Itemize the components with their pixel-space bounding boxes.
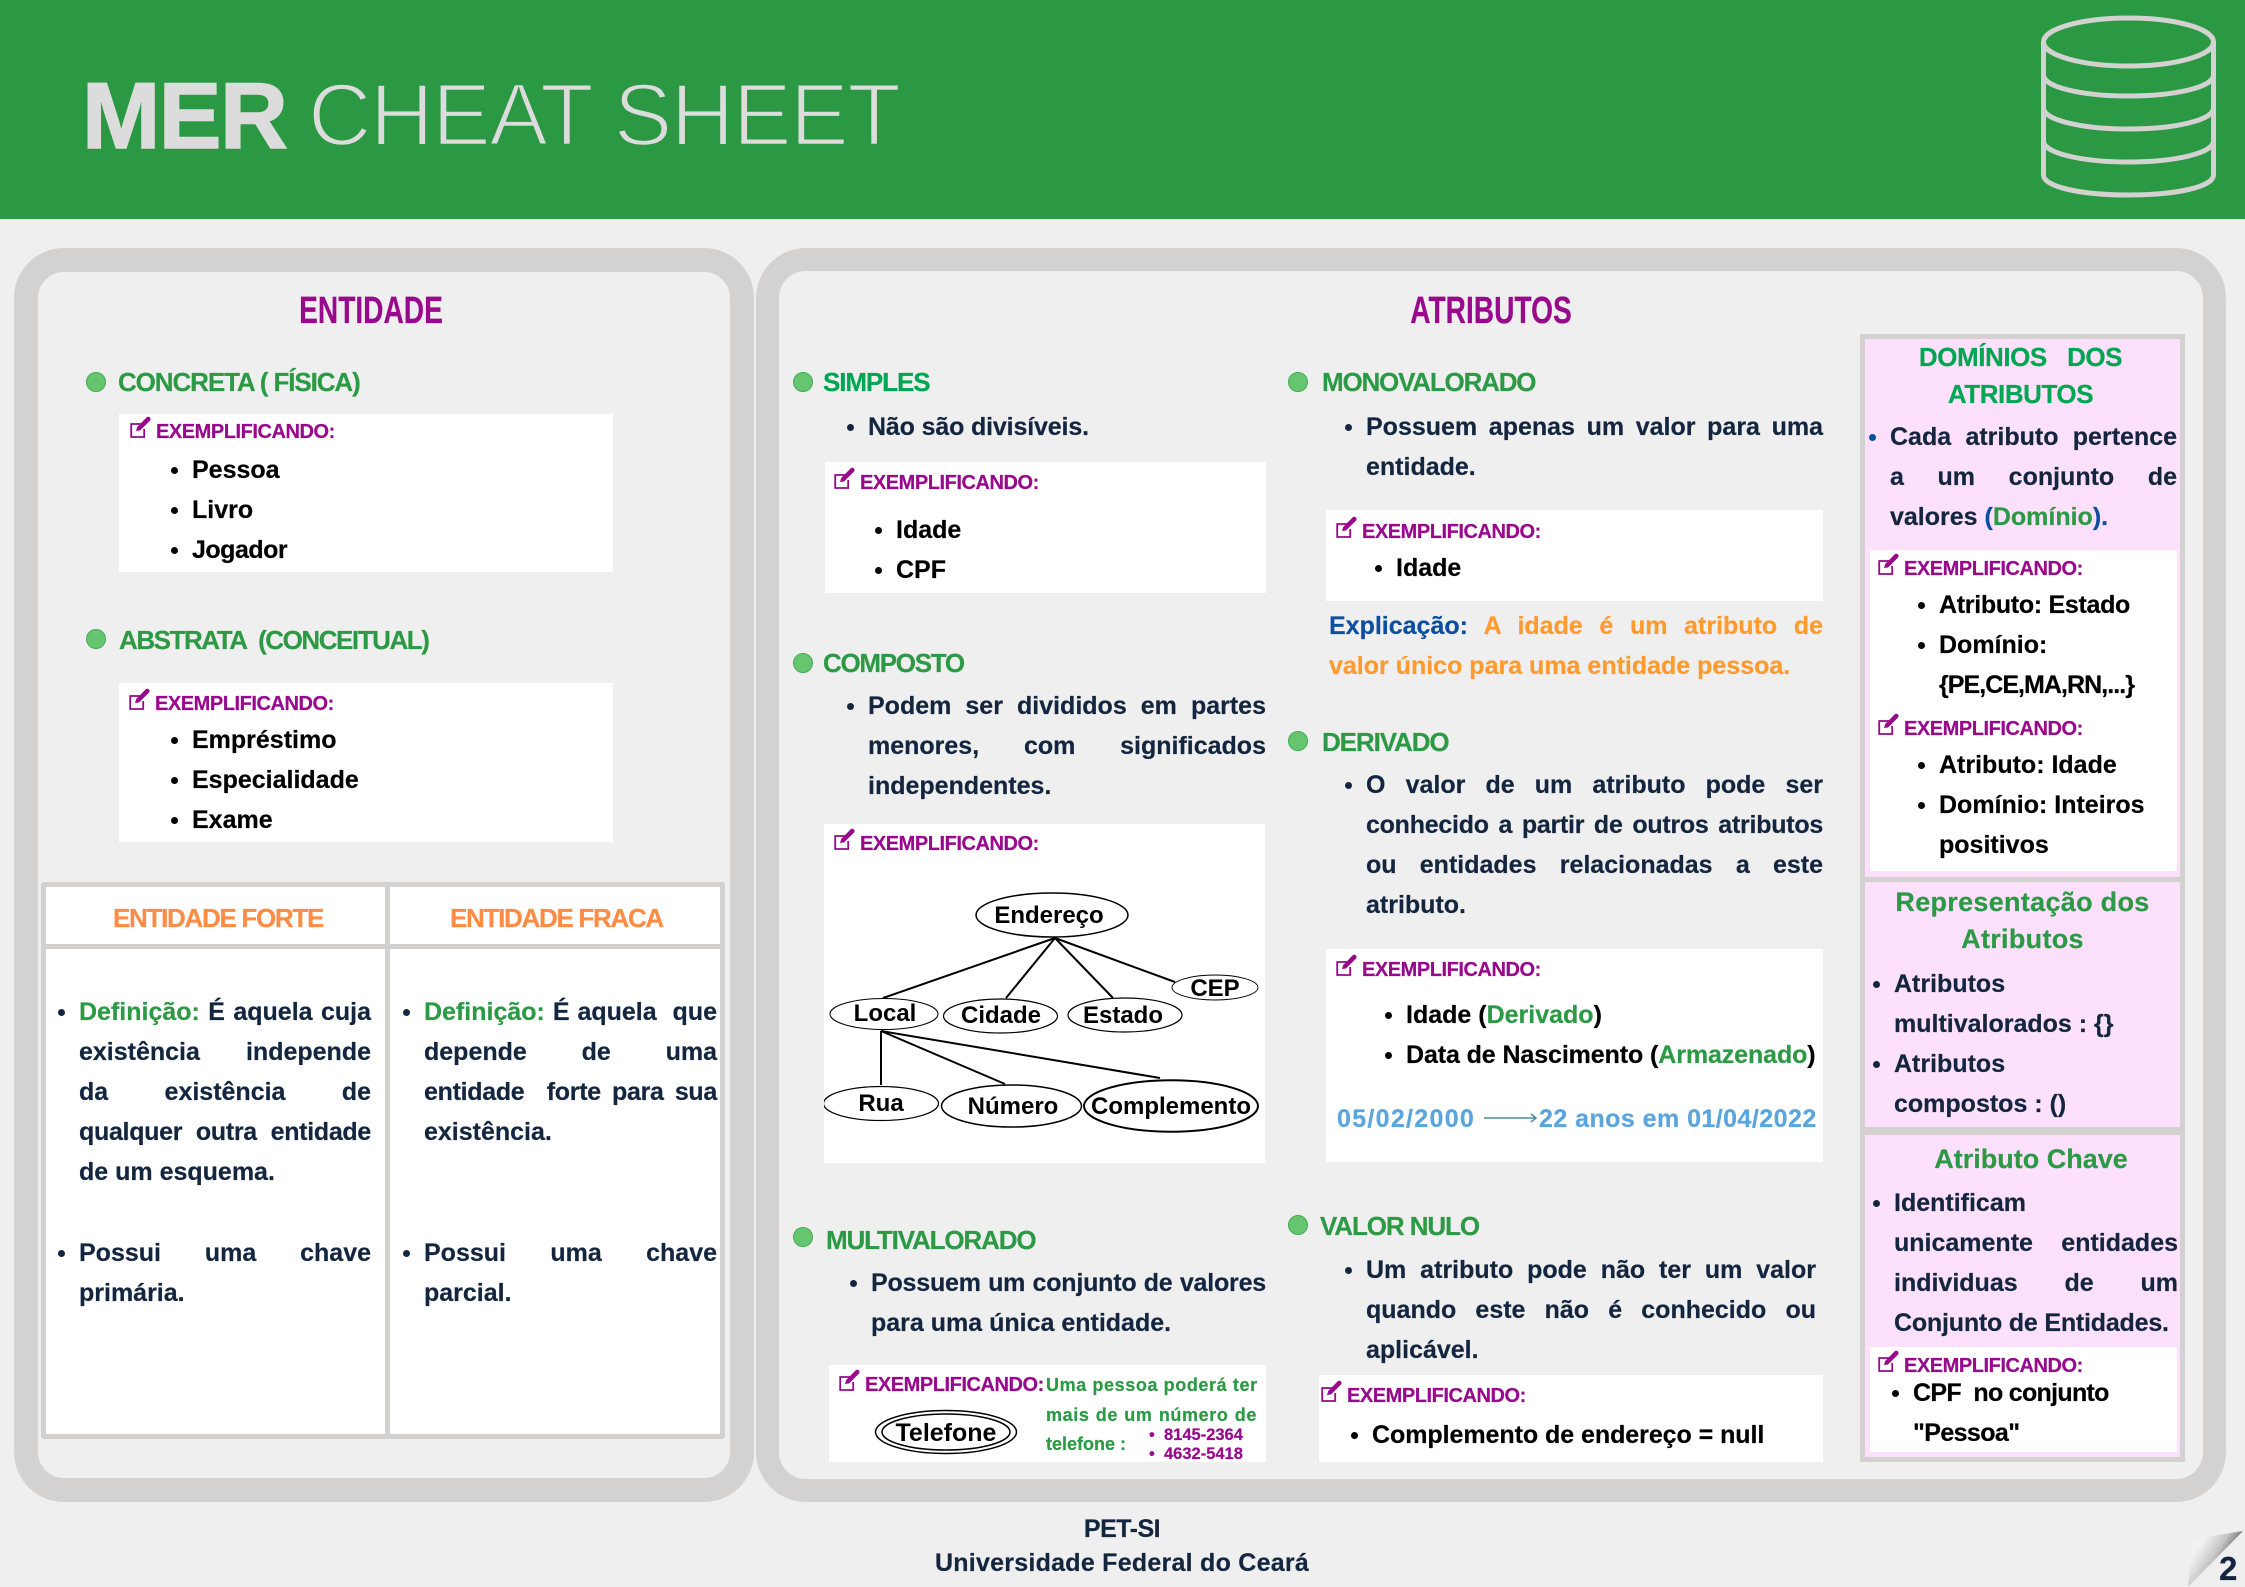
heading: representação: Atributos: [1961, 924, 2084, 954]
diagram: atributo composto endereço: Cidade: [961, 1002, 1041, 1029]
heading: ATRIBUTOS: ATRIBUTOS: [1410, 290, 1572, 332]
example text: [1046, 1375, 1258, 1454]
example calculation: [1337, 1105, 1817, 1133]
text: multivalorado: [850, 1269, 1266, 1337]
text: multivalorado: para uma única entidade.: [871, 1309, 1171, 1337]
diagram: atributo composto endereço: Número: [968, 1093, 1058, 1120]
example label: EXEMPLIFICANDO:: [860, 833, 1039, 855]
text: atributo chave: unicamente entidades: [1894, 1229, 2178, 1257]
example box: composto: [824, 824, 1265, 1163]
heading: ENTIDADE: ENTIDADE: [299, 290, 443, 332]
bullet dot: valor nulo: [1288, 1215, 1308, 1235]
column title: entidade fraca: ENTIDADE FRACA: [450, 903, 663, 933]
cell text: definição forte: Definição: É aquela cuja: [79, 998, 371, 1026]
example box: multivalorado: •: [1149, 1445, 1155, 1463]
example list: Exame: [192, 806, 273, 834]
example list: "Pessoa": [1913, 1419, 2019, 1447]
heading: atributo chave: Atributo Chave: [1934, 1144, 2128, 1174]
text: explicação: valor único para uma entidade pessoa.: [1329, 652, 1790, 680]
example box: abstrata: [119, 683, 613, 842]
table: entidade forte e fraca: [41, 882, 725, 1439]
example list 1: {PE,CE,MA,RN,...}: [1939, 671, 2134, 699]
example label: EXEMPLIFICANDO:: [156, 421, 335, 443]
panel: domínios dos atributos: [1860, 334, 2185, 882]
title: MER: MER: [82, 63, 286, 168]
text: composto: menores, com significados: [868, 732, 1266, 760]
text: atributo chave: Conjunto de Entidades.: [1894, 1309, 2169, 1337]
bullet dot: multivalorado: [793, 1227, 813, 1247]
text: monovalorado: [1345, 413, 1824, 481]
arrow: [1484, 1114, 1538, 1122]
text: derivado: ou entidades relacionadas a este: [1366, 851, 1823, 879]
heading: multivalorado: MULTIVALORADO: [826, 1225, 1035, 1255]
heading: simples: SIMPLES: [823, 367, 929, 397]
panel: representação dos atributos: [1860, 882, 2185, 1132]
text: monovalorado: Possuem apenas um valor para uma: [1366, 413, 1823, 441]
text: domínios: valores (Domínio).: [1890, 503, 2108, 531]
diagram: atributo composto endereço: Local: [854, 1000, 916, 1027]
example list: [171, 456, 288, 564]
example list: [1913, 1373, 2173, 1453]
cell text: definição forte: de um esquema.: [79, 1158, 275, 1186]
text: atributo chave: individuas de um: [1894, 1269, 2178, 1297]
bullet dot: simples: [793, 372, 813, 392]
heading: domínios: [1919, 342, 2122, 409]
heading: concreta: CONCRETA ( FÍSICA): [118, 367, 360, 397]
page number with curl: [2185, 1525, 2245, 1587]
cell text: definição fraca: entidade forte para sua: [424, 1078, 717, 1106]
footer: Universidade Federal do Ceará: [935, 1548, 1309, 1576]
text: atributo chave: Identificam: [1894, 1189, 2026, 1217]
diagram: atributo composto endereço: [824, 892, 1259, 1133]
panel: atributo chave: [1860, 1130, 2185, 1462]
example list: Pessoa: [192, 456, 280, 484]
cell text: definição fraca: [403, 998, 718, 1146]
heading: domínios: DOMÍNIOS DOS: [1919, 342, 2122, 372]
title: CHEAT SHEET: CHEAT SHEET: [308, 65, 899, 164]
cell text: definição forte: da existência de: [79, 1078, 371, 1106]
example label: EXEMPLIFICANDO:: [1904, 1355, 2083, 1377]
example list: CPF: [896, 556, 946, 584]
text: domínios: a um conjunto de: [1890, 463, 2177, 491]
diagram: atributo multivalorado telefone: Telefone: [896, 1419, 997, 1447]
text: representação: compostos : (): [1894, 1090, 2066, 1118]
example list: Jogador: [192, 536, 287, 564]
example label: EXEMPLIFICANDO:: [860, 472, 1039, 494]
example label: EXEMPLIFICANDO:: [865, 1374, 1044, 1396]
bullet dot: concreta: [86, 372, 106, 392]
example list 2: positivos: [1939, 831, 2049, 859]
text: simples: Não são divisíveis.: [868, 413, 1089, 441]
text: monovalorado: entidade.: [1366, 453, 1476, 481]
panel: atributos: [756, 248, 2226, 1502]
diagram: atributo composto endereço: Endereço: [994, 902, 1104, 929]
example list: Data de Nascimento (Armazenado): [1406, 1041, 1816, 1069]
example box: concreta: [119, 414, 613, 572]
text: multivalorado: Possuem um conjunto de valores: [871, 1269, 1266, 1297]
cell text: chave parcial: parcial.: [424, 1279, 512, 1307]
cell text: definição fraca: existência.: [424, 1118, 552, 1146]
heading: representação: Representação dos: [1895, 887, 2150, 917]
cell text: chave parcial: [403, 1239, 717, 1307]
example text: mais de um número de: [1046, 1405, 1257, 1425]
heading: derivado: DERIVADO: [1322, 727, 1449, 757]
text: composto: [847, 692, 1266, 800]
example label: EXEMPLIFICANDO:: [1347, 1385, 1526, 1407]
example calculation: 05/02/2000: [1337, 1105, 1475, 1133]
text: valor nulo: quando este não é conhecido ou: [1366, 1296, 1816, 1324]
example list 2: Atributo: Idade: [1939, 751, 2117, 779]
diagram: atributo multivalorado telefone: [874, 1410, 1018, 1454]
example label: EXEMPLIFICANDO:: [1362, 521, 1541, 543]
text: derivado: O valor de um atributo pode ser: [1366, 771, 1823, 799]
example box: multivalorado: •: [1149, 1426, 1155, 1444]
example text: telefone :: [1046, 1434, 1126, 1454]
cell text: definição forte: qualquer outra entidade: [79, 1118, 371, 1146]
icon: database: [2041, 16, 2216, 198]
diagram: atributo composto endereço: Estado: [1083, 1002, 1163, 1029]
diagram: atributo composto endereço: CEP: [1190, 975, 1240, 1002]
text: derivado: conhecido a partir de outros atributos: [1366, 811, 1823, 839]
text: domínios: Cada atributo pertence: [1890, 423, 2177, 451]
example list 1: Atributo: Estado: [1939, 591, 2130, 619]
phone list: [1149, 1426, 1243, 1463]
phone list: 8145-2364: [1164, 1426, 1243, 1444]
diagram: atributo composto endereço: Complemento: [1091, 1093, 1251, 1120]
example label 2: EXEMPLIFICANDO:: [1904, 718, 2083, 740]
example box: multivalorado: [829, 1365, 1266, 1462]
text: representação: multivalorados : {}: [1894, 1010, 2114, 1038]
cell text: definição forte: existência independe: [79, 1038, 371, 1066]
bullet dot: monovalorado: [1288, 372, 1308, 392]
text: domínios: [1869, 423, 2177, 531]
panel: entidade: [14, 248, 754, 1502]
example list: Empréstimo: [192, 726, 336, 754]
heading: representação: [1895, 887, 2150, 954]
example list: Complemento de endereço = null: [1372, 1421, 1764, 1449]
text: representação: [1873, 970, 2114, 1118]
example box: valor nulo: [1319, 1375, 1823, 1462]
example box: domínios: [1870, 550, 2177, 871]
footer: [322, 1512, 1922, 1580]
text: explicação: Explicação: A idade é um atributo de: [1329, 612, 1823, 640]
phone list: 4632-5418: [1164, 1445, 1243, 1463]
example list 1: Domínio:: [1939, 631, 2047, 659]
example text: Uma pessoa poderá ter: [1046, 1375, 1258, 1395]
header banner: [0, 0, 2245, 219]
footer: PET-SI: [1084, 1514, 1160, 1542]
column divider: [385, 887, 390, 1434]
example list: CPF no conjunto: [1913, 1379, 2109, 1407]
text: representação: Atributos: [1894, 970, 2005, 998]
heading: monovalorado: MONOVALORADO: [1322, 367, 1535, 397]
bullet dot: composto: [793, 653, 813, 673]
heading: valor nulo: VALOR NULO: [1320, 1211, 1479, 1241]
example list: Idade: [896, 516, 961, 544]
example box: monovalorado: [1326, 510, 1823, 601]
column title: entidade forte: ENTIDADE FORTE: [113, 903, 323, 933]
example list: Idade: [1396, 554, 1461, 582]
example list 1: [1918, 591, 2135, 699]
cell text: chave primária: Possui uma chave: [79, 1239, 371, 1267]
example label 1: EXEMPLIFICANDO:: [1904, 558, 2083, 580]
example list: Idade (Derivado): [1406, 1001, 1602, 1029]
text: derivado: atributo.: [1366, 891, 1466, 919]
cell text: definição forte: [58, 998, 372, 1186]
text: derivado: [1345, 771, 1823, 919]
text: explicação: [1329, 612, 1823, 680]
cell text: chave primária: primária.: [79, 1279, 185, 1307]
text: composto: Podem ser divididos em partes: [868, 692, 1266, 720]
example box: derivado: [1326, 949, 1823, 1162]
text: representação: Atributos: [1894, 1050, 2005, 1078]
text: valor nulo: [1345, 1256, 1816, 1364]
example list 2: [1918, 751, 2145, 859]
cell text: definição fraca: depende de uma: [424, 1038, 717, 1066]
example list: [875, 516, 961, 584]
page number: 2: [2219, 1550, 2237, 1587]
example box: simples: [825, 462, 1266, 593]
heading: composto: COMPOSTO: [823, 648, 964, 678]
example list: Especialidade: [192, 766, 359, 794]
bullet dot: abstrata: [86, 629, 106, 649]
example calculation: 22 anos em 01/04/2022: [1539, 1105, 1817, 1133]
example box: atributo chave: [1870, 1347, 2177, 1452]
header divider: [46, 944, 720, 949]
example list: [1385, 1001, 1816, 1069]
example label: EXEMPLIFICANDO:: [1362, 959, 1541, 981]
cell text: chave parcial: Possui uma chave: [424, 1239, 717, 1267]
bullet dot: derivado: [1288, 731, 1308, 751]
heading: abstrata: ABSTRATA (CONCEITUAL): [119, 625, 428, 655]
cell text: definição fraca: Definição: É aquela que: [424, 998, 717, 1026]
text: atributo chave: [1894, 1183, 2178, 1343]
heading: domínios: ATRIBUTOS: [1948, 379, 2093, 409]
cell text: chave primária: [58, 1239, 371, 1307]
example label: EXEMPLIFICANDO:: [155, 693, 334, 715]
example list: Livro: [192, 496, 253, 524]
example list: [171, 726, 359, 834]
example list 2: Domínio: Inteiros: [1939, 791, 2145, 819]
text: composto: independentes.: [868, 772, 1051, 800]
text: valor nulo: Um atributo pode não ter um valor: [1366, 1256, 1816, 1284]
diagram: atributo composto endereço: Rua: [858, 1090, 904, 1117]
text: valor nulo: aplicável.: [1366, 1336, 1479, 1364]
